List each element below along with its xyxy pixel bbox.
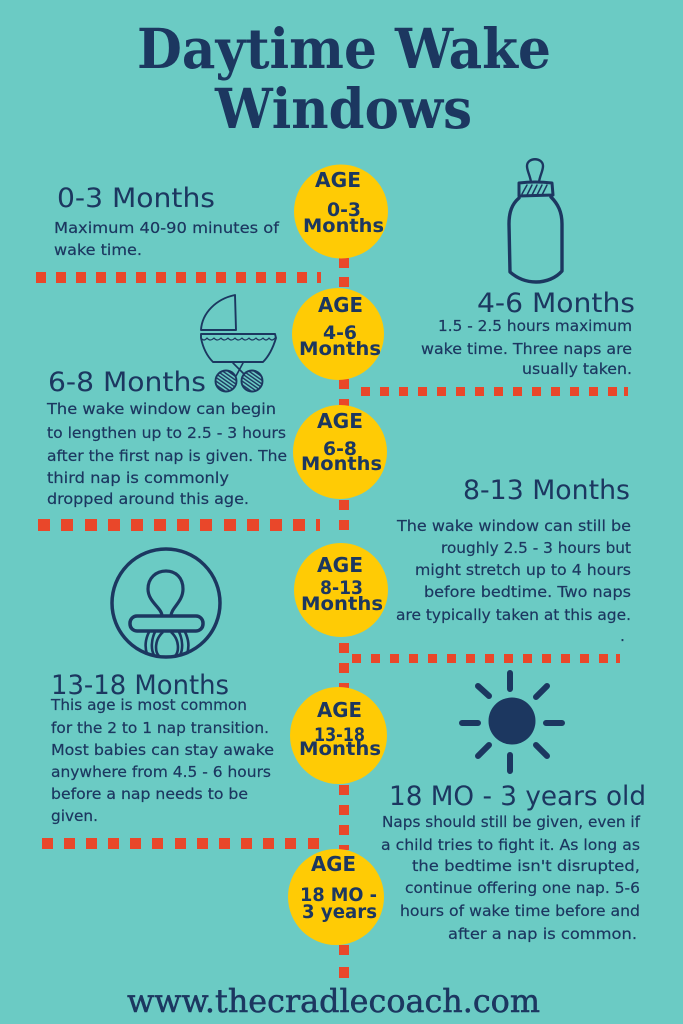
age badge: 6-8 months: AGE <box>317 409 363 433</box>
section: 8-13 months: roughly 2.5 - 3 hours but <box>441 539 631 557</box>
section: 6-8 months: dropped around this age. <box>47 490 249 508</box>
section: 13-18 months: 13-18 Months <box>51 670 229 701</box>
section: 8-13 months: before bedtime. Two naps <box>424 583 631 601</box>
age badge: 13-18 months <box>290 687 387 784</box>
age badge: 18 months to 3 years <box>288 849 384 945</box>
section: 6-8 months <box>46 367 287 508</box>
section: 8-13 months: The wake window can still be <box>396 517 631 535</box>
section: 8-13 months: . <box>620 627 625 645</box>
section: 18 months to 3 years: the bedtime isn't disrupted, <box>412 857 640 875</box>
age badge: 8-13 months: AGE <box>317 553 363 577</box>
section: 4-6 months: 4-6 Months <box>477 288 635 319</box>
section: 13-18 months: for the 2 to 1 nap transition. <box>51 719 269 737</box>
section: 13-18 months: Most babies can stay awake <box>51 741 274 759</box>
section: 18 months to 3 years: continue offering one nap. 5-6 <box>405 879 640 897</box>
section: 6-8 months: The wake window can begin <box>46 400 276 418</box>
dashed divider 2 <box>361 387 628 396</box>
section: 18 months to 3 years: after a nap is common. <box>448 925 637 943</box>
section: 13-18 months: before a nap needs to be <box>51 785 248 803</box>
section: 0-3 months: 0-3 Months <box>57 183 215 214</box>
title <box>137 16 551 141</box>
section: 4-6 months <box>421 288 635 378</box>
dashed divider 4 <box>352 654 620 663</box>
section: 4-6 months: usually taken. <box>522 360 632 378</box>
section: 4-6 months: wake time. Three naps are <box>421 340 632 358</box>
section: 18 months to 3 years: Naps should still be given, even if <box>382 813 641 831</box>
section: 6-8 months: to lengthen up to 2.5 - 3 hours <box>47 424 286 442</box>
section: 13-18 months <box>50 670 274 825</box>
section: 6-8 months: third nap is commonly <box>47 469 229 487</box>
age badge: 0-3 months: 0-3 <box>327 199 361 221</box>
section: 0-3 months: wake time. <box>54 241 142 259</box>
age badge: 13-18 months: AGE <box>317 698 362 722</box>
age badge: 8-13 months: 8-13 <box>320 577 363 599</box>
age badge: 4-6 months: 4-6 <box>323 322 357 344</box>
age badge: 0-3 months: AGE <box>315 168 361 192</box>
timeline: vertical dashed line <box>339 258 349 978</box>
age badge: 4-6 months <box>292 288 384 380</box>
age badge: 6-8 months: 6-8 <box>323 438 357 460</box>
section: 0-3 months <box>54 183 280 259</box>
age badge: 13-18 months: 13-18 <box>314 724 365 746</box>
title: Daytime Wake <box>137 16 551 81</box>
section: 13-18 months: This age is most common <box>50 696 247 714</box>
age badge: 6-8 months <box>293 405 387 499</box>
age badge: 13-18 months: Months <box>299 738 381 760</box>
age badge: 0-3 months: Months <box>303 215 384 237</box>
age badge: 6-8 months: Months <box>301 453 382 475</box>
section: 0-3 months: Maximum 40-90 minutes of <box>54 219 280 237</box>
age badge: 4-6 months: Months <box>299 338 381 360</box>
website url: www.thecradlecoach.com <box>127 982 540 1020</box>
icon: sun <box>462 673 562 771</box>
dashed divider 5 <box>42 838 319 849</box>
dashed divider 1 <box>36 272 321 283</box>
title: Windows <box>214 76 472 141</box>
section: 8-13 months: 8-13 Months <box>463 475 630 506</box>
section: 13-18 months: anywhere from 4.5 - 6 hours <box>51 763 271 781</box>
icon: baby bottle <box>509 159 562 282</box>
age badge: 8-13 months <box>294 543 388 637</box>
section: 8-13 months: are typically taken at this age. <box>396 606 631 624</box>
section: 4-6 months: 1.5 - 2.5 hours maximum <box>438 317 632 335</box>
section: 8-13 months <box>396 475 631 645</box>
age badge: 18 months to 3 years: 18 MO - <box>300 884 377 906</box>
age badge: 18 months to 3 years: 3 years <box>302 901 377 923</box>
age badge: 18 months to 3 years: AGE <box>311 852 356 876</box>
section: 18 months to 3 years: a child tries to fight it. As long as <box>381 836 640 854</box>
section: 13-18 months: given. <box>51 807 98 825</box>
section: 18 months to 3 years: 18 MO - 3 years old <box>389 781 646 812</box>
age badge: 0-3 months <box>294 164 388 258</box>
section: 8-13 months: might stretch up to 4 hours <box>415 561 631 579</box>
age badge: 4-6 months: AGE <box>318 293 363 317</box>
dashed divider 3 <box>38 519 320 531</box>
section: 6-8 months: 6-8 Months <box>48 367 206 398</box>
section: 18 months to 3 years <box>381 781 646 943</box>
icon: pacifier <box>112 549 220 657</box>
section: 6-8 months: after the first nap is given. The <box>47 447 287 465</box>
age badge: 8-13 months: Months <box>301 593 383 615</box>
icon: baby stroller <box>201 295 276 392</box>
section: 18 months to 3 years: hours of wake time before and <box>400 902 640 920</box>
